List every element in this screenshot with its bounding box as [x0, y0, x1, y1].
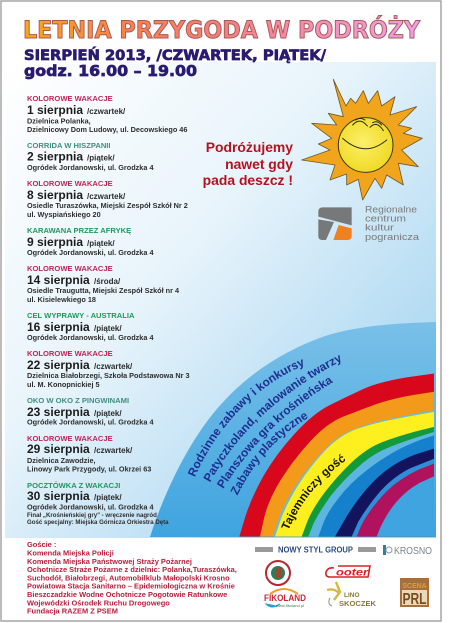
slogan	[203, 139, 293, 188]
rainbow band: navy	[335, 448, 435, 537]
event: 9 sierpnia	[27, 226, 154, 257]
sponsor: Lino Skoczek: LINO	[344, 592, 360, 599]
event: 29 sierpnia: Linowy Park Przygody, ul. Okrzei 63	[27, 464, 151, 474]
rainbow band: yellow	[275, 412, 435, 537]
guests list: Bieszczadzkie Wodne Ochotnicze Pogotowie Ratunkowe	[27, 590, 227, 599]
event: 22 sierpnia: 22 sierpnia	[27, 358, 90, 372]
event: 23 sierpnia: OKO W OKO Z PINGWINAMI	[27, 396, 129, 405]
rainbow	[239, 373, 435, 537]
event: 16 sierpnia	[27, 311, 154, 342]
rainbow band: blue	[318, 435, 435, 537]
sponsor: Scena PRL: PRL	[402, 591, 427, 608]
event: 1 sierpnia: 1 sierpnia	[27, 103, 83, 117]
event: 14 sierpnia: Osiedle Traugutta, Miejski Zespół Szkół nr 4	[27, 286, 180, 295]
event: 29 sierpnia: KOLOROWE WAKACJE	[27, 434, 113, 443]
icon: smiling sun	[302, 79, 422, 200]
sponsor: Fikoland: FIKOLAND	[264, 593, 306, 603]
sponsor: Fikoland	[264, 589, 306, 608]
event: 8 sierpnia: KOLOROWE WAKACJE	[27, 179, 113, 188]
event: 8 sierpnia: Osiedle Turaszówka, Miejski Zespół Szkół Nr 2	[27, 201, 188, 210]
guests list: Wojewódzki Ośrodek Ruchu Drogowego	[27, 598, 170, 607]
event: 22 sierpnia: KOLOROWE WAKACJE	[27, 349, 113, 358]
blue hill	[150, 322, 436, 537]
subtitle: month and days: SIERPIEŃ 2013, /CZWARTEK, PIĄTEK/	[24, 46, 327, 64]
event: 16 sierpnia: 16 sierpnia	[27, 320, 90, 334]
title: LETNIA PRZYGODA W PODRÓŻY	[23, 14, 421, 44]
event: 14 sierpnia: ul. Kisielewkiego 18	[27, 295, 96, 304]
sponsor: Scena PRL	[400, 578, 429, 608]
event: 29 sierpnia	[27, 434, 151, 474]
event: 9 sierpnia: KARAWANA PRZEZ AFRYKĘ	[27, 226, 131, 235]
event: 1 sierpnia: Dzielnica Polanka,	[27, 116, 91, 126]
logo wordmark: pogranicza	[365, 232, 420, 243]
event: 30 sierpnia: Finał „Krośnieńskiej gry" - wręczenie nagród	[27, 512, 157, 519]
event: 2 sierpnia: Ogródek Jordanowski, ul. Grodzka 4	[27, 163, 154, 172]
logo wordmark	[365, 205, 420, 243]
event: 8 sierpnia: ul. Wyspiańskiego 20	[27, 210, 101, 219]
schedule list	[27, 94, 190, 526]
rainbow gap 2	[308, 432, 435, 537]
event: 30 sierpnia: POCZTÓWKA Z WAKACJI	[27, 481, 120, 490]
activity: zabawy plastyczne: Zabawy plastyczne	[230, 413, 308, 496]
event: 23 sierpnia	[27, 396, 154, 426]
guests list: Suchodół, Białobrzegi, Automobilklub Małopolski Krosno	[27, 573, 230, 582]
event: 1 sierpnia	[27, 94, 187, 134]
sponsor: fire brigade emblem	[266, 561, 290, 585]
rainbow gap 3	[352, 458, 435, 537]
mystery guest on the rainbow: Tajemniczy gość	[281, 454, 346, 528]
slogan: Podróżujemy	[206, 139, 293, 155]
logo wordmark: centrum	[365, 214, 406, 225]
event: 9 sierpnia: Ogródek Jordanowski, ul. Grodzka 4	[27, 248, 154, 257]
rainbow band: red	[239, 373, 435, 537]
event: 2 sierpnia	[27, 141, 154, 172]
event: 30 sierpnia: /piątek/	[94, 493, 122, 502]
event: 9 sierpnia: /piątek/	[87, 239, 115, 248]
logo wordmark: Regionalne	[365, 205, 417, 216]
sponsor: Lino Skoczek	[327, 582, 376, 608]
event: 1 sierpnia: Dzielnicowy Dom Ludowy, ul. Decowskiego 46	[27, 125, 187, 134]
event: 22 sierpnia	[27, 349, 190, 389]
event: 2 sierpnia: 2 sierpnia	[27, 150, 83, 164]
guests list: Komenda Miejska Policji	[27, 548, 114, 558]
sponsor: Nowy Styl Group	[255, 546, 376, 554]
event: 16 sierpnia: CEL WYPRAWY - AUSTRALIA	[27, 311, 135, 320]
event: 14 sierpnia	[27, 264, 180, 304]
sponsor: Krosno	[383, 545, 432, 557]
event: 9 sierpnia: 9 sierpnia	[27, 235, 83, 249]
subtitle: hours: godz. 16.00 – 19.00	[24, 62, 197, 80]
guests list: Komenda Miejska Państwowej Straży Pożarnej	[27, 557, 192, 566]
event: 1 sierpnia: KOLOROWE WAKACJE	[27, 94, 113, 103]
event: 14 sierpnia: 14 sierpnia	[27, 273, 90, 287]
logo mark	[318, 207, 352, 240]
activity: rodzinne zabawy: Rodzinne zabawy i konkursy	[188, 359, 303, 477]
event: 23 sierpnia: Ogródek Jordanowski, ul. Grodzka 4	[27, 418, 154, 426]
event: 14 sierpnia: /środa/	[94, 277, 121, 286]
event: 29 sierpnia: Dzielnica Zawodzie,	[27, 456, 96, 465]
event: 30 sierpnia: 30 sierpnia	[27, 489, 90, 503]
rainbow band: orange	[260, 392, 435, 537]
event: 22 sierpnia: ul. M. Konopnickiej 5	[27, 380, 100, 389]
activity: patyczkoland: Patyczkoland, malowanie twarzy	[203, 355, 340, 482]
event: 22 sierpnia: /czwartek/	[94, 362, 133, 371]
logo wordmark: kultur	[365, 223, 394, 234]
sponsor: Lino Skoczek: SKOCZEK	[339, 601, 376, 608]
rainbow band: magenta	[357, 463, 435, 537]
event: 30 sierpnia: Ogródek Jordanowski, ul. Grodzka 4	[27, 502, 154, 512]
event: 16 sierpnia: /piątek/	[94, 324, 122, 333]
event: 16 sierpnia: Ogródek Jordanowski, ul. Grodzka 4	[27, 333, 154, 342]
guests list: Fundacja RAZEM Z PSEM	[27, 606, 118, 616]
event: 30 sierpnia	[27, 481, 169, 526]
activity: planszowa gra: Planszowa gra krośnieńska	[216, 378, 333, 488]
sponsor: Fikoland: www.fikoland.pl	[276, 604, 304, 608]
event: 8 sierpnia: /czwartek/	[87, 192, 126, 201]
guests list: Goście :	[27, 540, 56, 549]
sponsor: Nowy Styl Group: NOWY STYL GROUP	[278, 546, 354, 554]
guests list: Powiatowa Stacja Sanitarno – Epidemiologiczna w Krośnie	[27, 582, 235, 591]
event: 30 sierpnia: Gość specjalny: Miejska Górnicza Orkiestra Dęta	[27, 519, 169, 526]
sponsor: Scena PRL: SCENA	[402, 583, 427, 590]
event: 2 sierpnia: /piątek/	[87, 154, 115, 162]
rainbow band: green	[302, 427, 435, 537]
sponsor: Krosno: KROSNO	[394, 545, 432, 557]
guests list: Ochotnicze Straże Pożarne z dzielnic: Polanka,Turaszówka,	[27, 565, 237, 574]
guests list	[27, 540, 237, 616]
event: 29 sierpnia: /czwartek/	[94, 446, 133, 455]
rainbow gap	[273, 410, 435, 537]
logo: Regionalne Centrum Kultur Pogranicza	[318, 205, 420, 243]
event: 29 sierpnia: 29 sierpnia	[27, 442, 90, 456]
slogan: nawet gdy	[225, 156, 293, 172]
activities on the hill	[188, 355, 346, 528]
event: 23 sierpnia: 23 sierpnia	[27, 405, 90, 419]
rainbow inner sky	[377, 476, 435, 537]
event: 14 sierpnia: KOLOROWE WAKACJE	[27, 264, 113, 273]
event: 1 sierpnia: /czwartek/	[87, 107, 126, 116]
event: 23 sierpnia: /piątek/	[94, 409, 122, 418]
slogan: pada deszcz !	[203, 172, 293, 188]
event: 22 sierpnia: Dzielnica Białobrzegi, Szkoła Podstawowa Nr 3	[27, 371, 190, 380]
event: 2 sierpnia: CORRIDA W HISZPANII	[27, 141, 111, 150]
background gradient panel	[5, 62, 436, 538]
event: 8 sierpnia: 8 sierpnia	[27, 188, 83, 202]
event: 8 sierpnia	[27, 179, 188, 219]
sponsor: red logo: ooter	[336, 568, 369, 578]
sponsor: red logo	[326, 566, 370, 578]
